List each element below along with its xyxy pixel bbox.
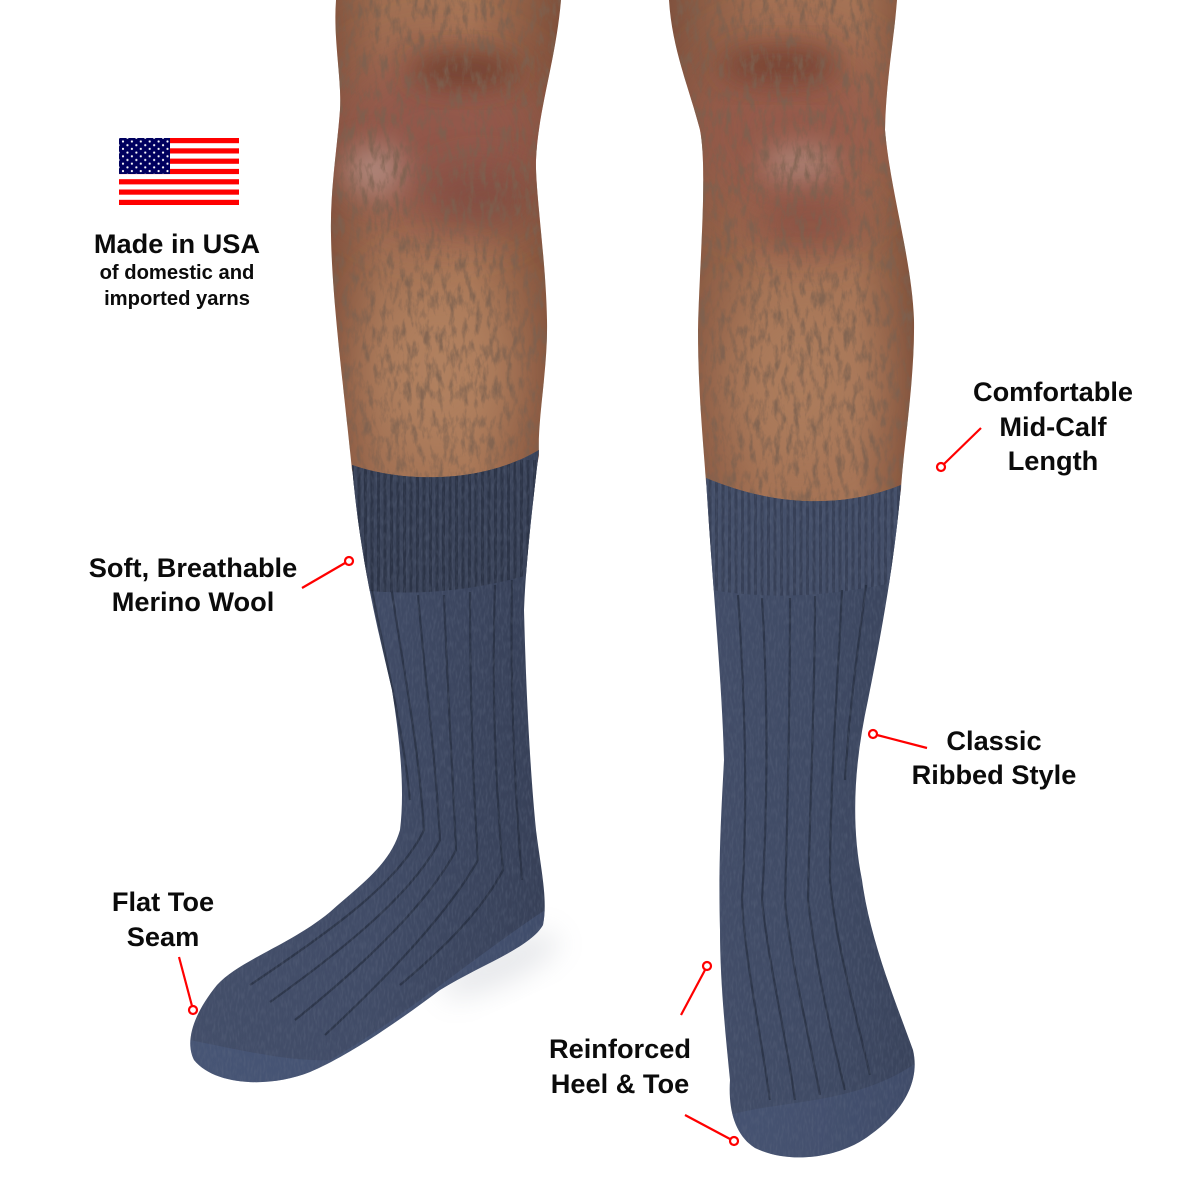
right leg: [669, 0, 914, 502]
callout: Classic Ribbed Style: Ribbed Style: [912, 759, 1076, 790]
right sock cuff: [706, 478, 901, 590]
left sock: [190, 450, 545, 1082]
callout: Comfortable Mid-Calf Length: Length: [1008, 445, 1098, 476]
callout: Soft, Breathable Merino Wool: Soft, Breathable: [89, 552, 297, 583]
callout: Classic Ribbed Style: [869, 725, 1076, 790]
left leg: [330, 0, 561, 478]
left sock toe: [190, 910, 550, 1085]
floor shadows: [433, 921, 567, 1009]
callout: Soft, Breathable Merino Wool: [89, 552, 353, 617]
text: Made in USA: of domestic and: [100, 262, 254, 284]
callout: Flat Toe Seam: Seam: [127, 921, 199, 952]
icon: American flag: [119, 138, 239, 205]
callout: Comfortable Mid-Calf Length: Comfortable: [973, 376, 1133, 407]
callout: Reinforced Heel & Toe: [549, 962, 738, 1145]
right sock toe: [732, 1064, 915, 1158]
callout: Flat Toe Seam: [112, 886, 214, 1014]
left sock cuff: [345, 460, 545, 592]
text: Made in USA: [94, 228, 260, 310]
right sock ribs: [738, 585, 870, 1100]
right sock: [700, 470, 920, 1170]
callout: Comfortable Mid-Calf Length: Mid-Calf: [999, 411, 1108, 442]
left sock ribs: [250, 580, 522, 1035]
callout: Reinforced Heel & Toe: Reinforced: [549, 1033, 691, 1064]
callout: Soft, Breathable Merino Wool: Merino Wool: [112, 586, 274, 617]
callout: Comfortable Mid-Calf Length: [937, 376, 1133, 476]
callout: Reinforced Heel & Toe: Heel & Toe: [551, 1068, 689, 1099]
callout: Flat Toe Seam: Flat Toe: [112, 886, 214, 917]
callout: Classic Ribbed Style: Classic: [946, 725, 1042, 756]
text: Made in USA: imported yarns: [104, 288, 250, 310]
text: Made in USA: Made in USA: [94, 228, 260, 259]
